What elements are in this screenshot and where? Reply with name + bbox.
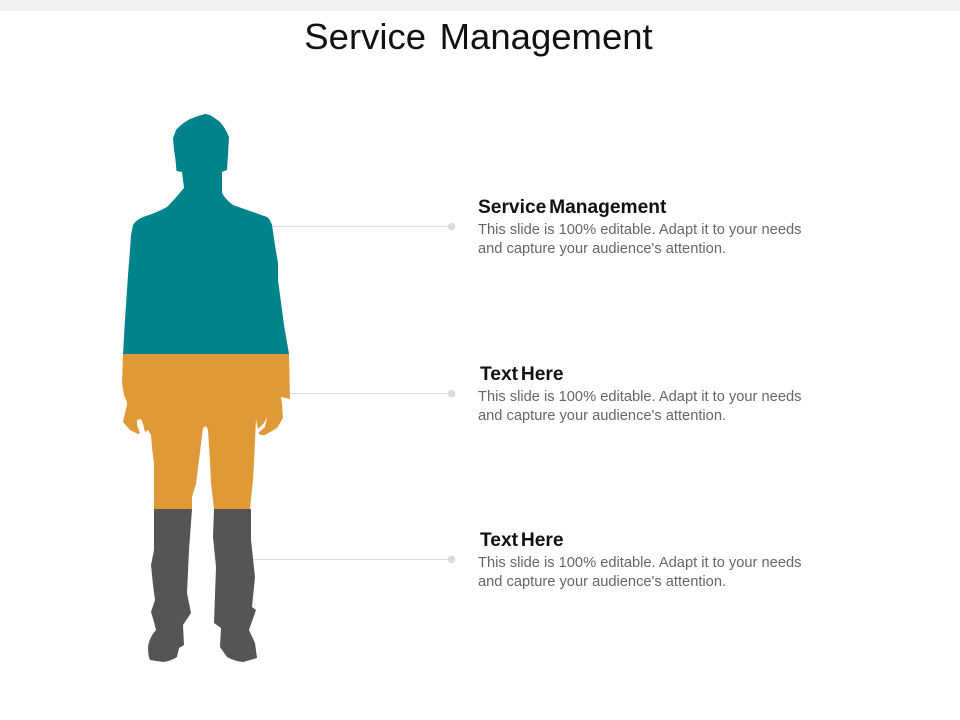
heading: text here: Text Here bbox=[480, 530, 564, 551]
description: and capture your audience's attention. bbox=[478, 240, 726, 256]
text block: service management bbox=[478, 197, 801, 256]
title: Service Management bbox=[304, 16, 653, 57]
text block: text here 2 bbox=[478, 530, 801, 590]
description bbox=[478, 555, 801, 590]
heading: service management: Service Management bbox=[478, 197, 666, 218]
description bbox=[478, 222, 801, 256]
description: This slide is 100% editable. Adapt it to your needs bbox=[478, 555, 801, 571]
silhouette: teal upper body bbox=[123, 114, 289, 354]
connector: text here 1 bbox=[288, 390, 455, 397]
description bbox=[478, 389, 801, 424]
silhouette: dark grey right leg bbox=[213, 509, 257, 662]
heading: text here: Text Here bbox=[480, 364, 564, 385]
text block: text here 1 bbox=[478, 364, 801, 424]
description: This slide is 100% editable. Adapt it to your needs bbox=[478, 389, 801, 405]
description: This slide is 100% editable. Adapt it to your needs bbox=[478, 222, 801, 238]
top grey band bbox=[0, 0, 960, 11]
description: and capture your audience's attention. bbox=[478, 408, 726, 424]
connector: service management bbox=[272, 223, 455, 230]
silhouette: dark grey left leg bbox=[148, 509, 192, 662]
silhouette: orange midsection bbox=[122, 354, 290, 509]
description: and capture your audience's attention. bbox=[478, 574, 726, 590]
connector: text here 2 bbox=[250, 556, 455, 563]
